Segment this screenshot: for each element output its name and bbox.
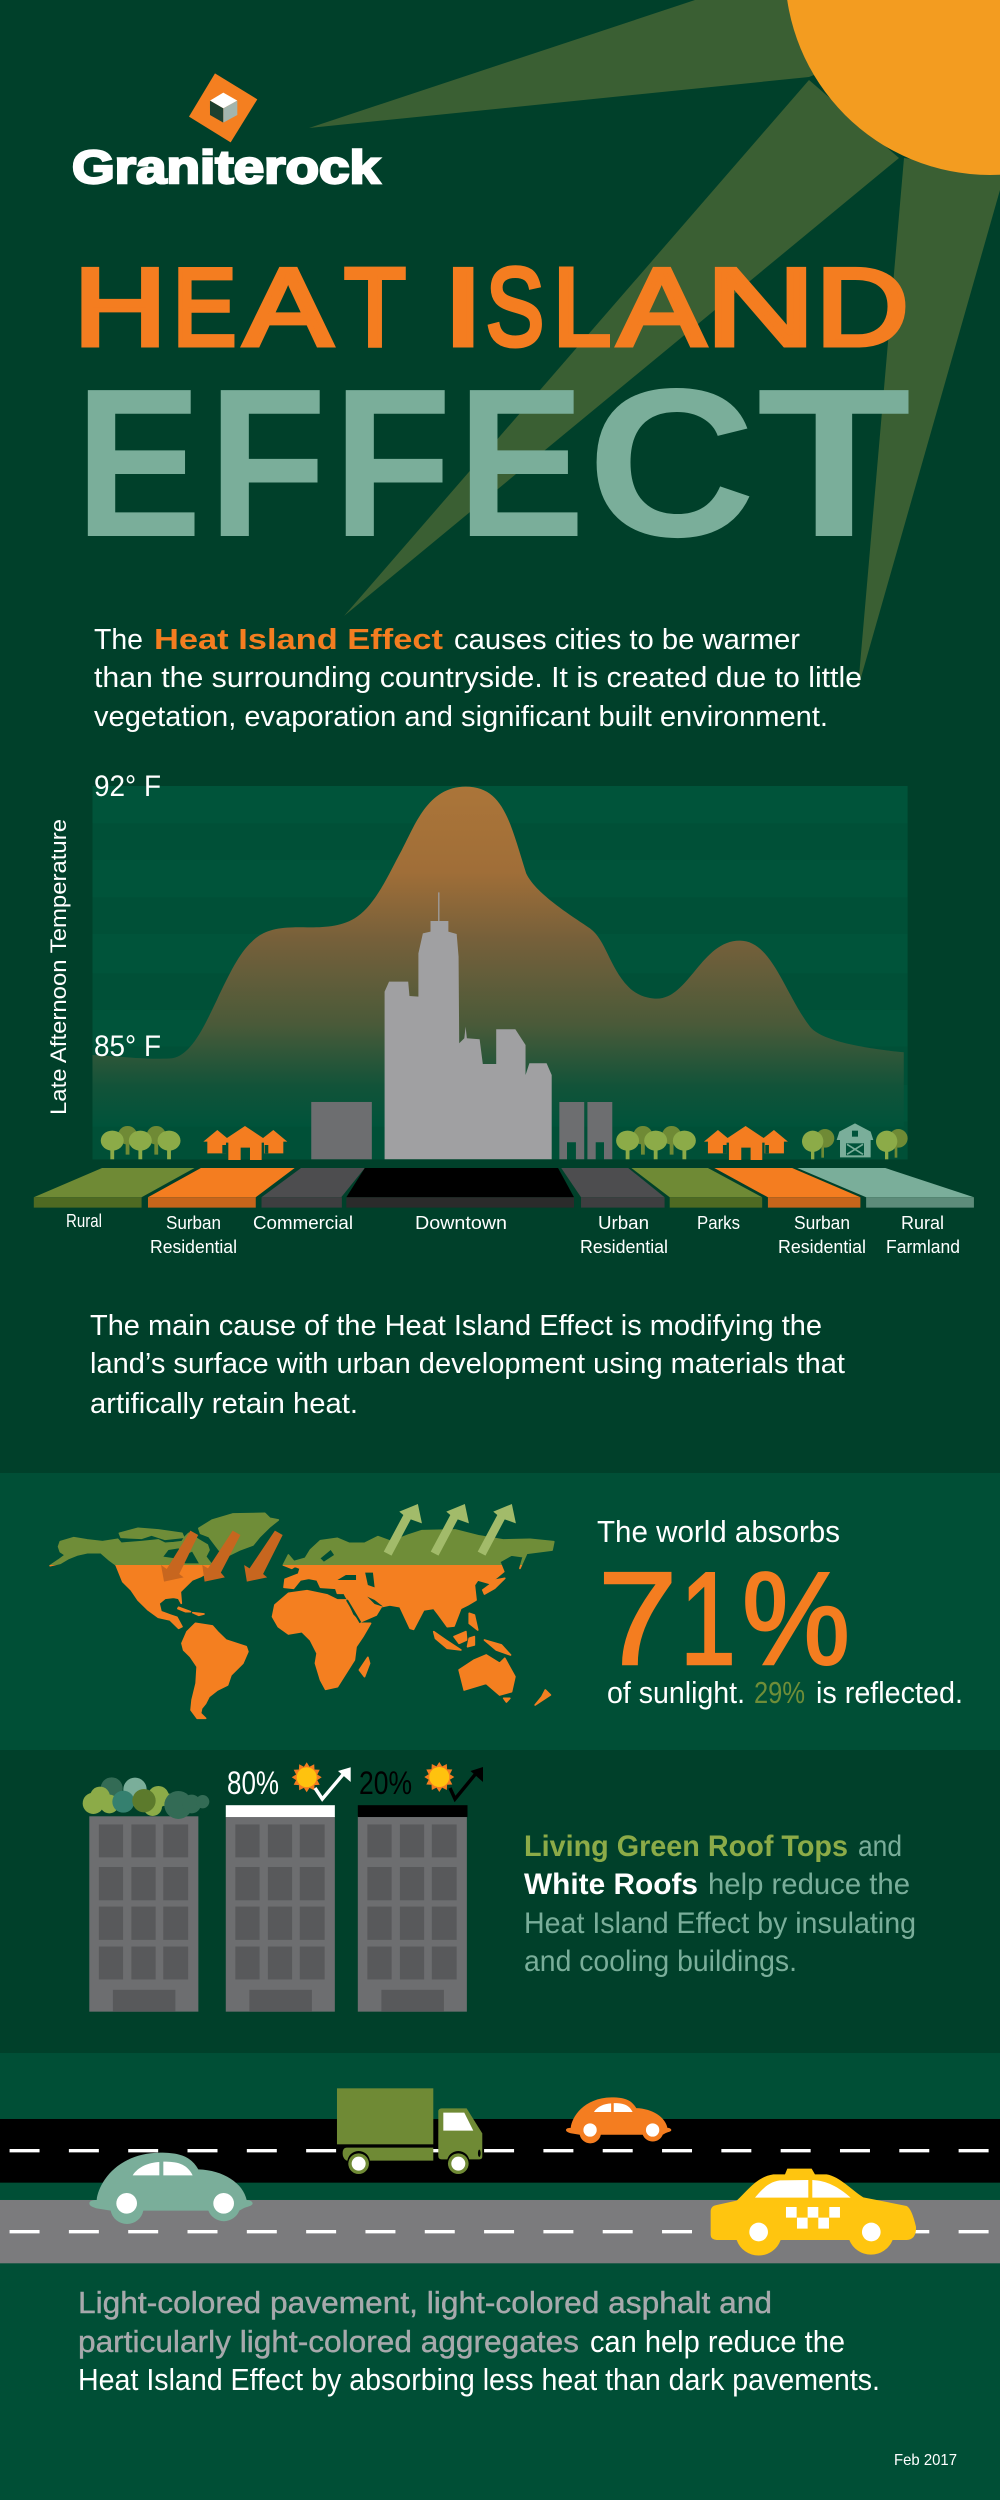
title: Effect: F: [208, 346, 327, 582]
grey road: [0, 2200, 1000, 2263]
title: Heat Island: A: [618, 245, 706, 369]
zone labels: Farmland: [886, 1237, 960, 1257]
suburban houses right: [704, 1126, 788, 1160]
taxi: [711, 2169, 916, 2256]
big number: %: [742, 1544, 850, 1692]
cause paragraph: artifically retain heat.: [90, 1388, 358, 1420]
roof text: help reduce the: [708, 1868, 910, 1901]
roads with vehicles: [0, 2088, 1000, 2263]
teal car: [89, 2153, 253, 2224]
title: Effect: F: [333, 346, 452, 582]
roof plants: [83, 1777, 209, 1819]
big number: 1: [680, 1545, 736, 1692]
building: black roof: [358, 1762, 483, 2012]
temperature curve: [92, 787, 904, 1127]
truck: [337, 2088, 482, 2174]
park trees: [616, 1126, 696, 1159]
zone labels: Residential: [778, 1237, 866, 1257]
title: Heat Island: E: [173, 246, 236, 368]
seas painted over land: [163, 1548, 383, 1623]
cause paragraph: [90, 1310, 845, 1420]
zone labels: Residential: [150, 1237, 237, 1257]
urban residential buildings: [559, 1102, 612, 1159]
logo: Graniterock: [72, 73, 380, 193]
roof text: White Roofs: [524, 1868, 698, 1901]
title: Heat Island: H: [74, 246, 166, 369]
date: Feb 2017: [894, 2452, 957, 2469]
title: Heat Island: D: [816, 247, 909, 369]
title: Effect: E: [457, 344, 585, 581]
zone labels: Rural: [901, 1213, 944, 1233]
title: Heat Island: I: [443, 245, 484, 369]
zone labels: Surban: [166, 1213, 221, 1233]
axis labels: [46, 770, 161, 1115]
zone labels: Residential: [580, 1237, 668, 1257]
downtown skyline: [385, 892, 552, 1159]
stat: world absorbs 71%: 29%: [754, 1675, 805, 1710]
title: Heat Island: N: [706, 246, 815, 369]
zone labels: Commercial: [253, 1213, 353, 1233]
zone labels: Urban: [598, 1213, 649, 1233]
map continents: [50, 1513, 554, 1718]
title: Heat Island: T: [344, 247, 406, 369]
intro text: [94, 624, 862, 733]
building: black roof: 20%: [359, 1765, 412, 1801]
title: Heat Island: L: [553, 246, 611, 369]
stat: world absorbs 71%: of sunlight.: [607, 1675, 745, 1710]
building: white roof: [226, 1762, 351, 2012]
icon: sun absorbed: [424, 1762, 483, 1799]
world map with sunlight arrows: [50, 1504, 554, 1718]
big number: 7: [598, 1546, 677, 1693]
roof text: [524, 1830, 916, 1978]
title: Effect: C: [587, 345, 756, 582]
arrows: absorbed sunlight: [161, 1531, 283, 1582]
arrows: reflected sunlight: [384, 1504, 516, 1556]
stat: world absorbs 71%: [597, 1514, 963, 1710]
zone labels: Rural: [66, 1211, 102, 1231]
chart: late afternoon temperature: [34, 770, 974, 1257]
roof text: Living Green Roof Tops: [524, 1830, 848, 1863]
building: white roof: 80%: [227, 1765, 279, 1801]
pavement text: Heat Island Effect by absorbing less heat than dark pavements.: [78, 2362, 880, 2397]
title: Heat Island: A: [244, 245, 332, 369]
axis labels: Late Afternoon Temperature: [46, 819, 71, 1115]
black road: [0, 2119, 1000, 2183]
intro text: The: [94, 624, 143, 656]
title: Effect: E: [75, 344, 202, 581]
zone labels: Surban: [794, 1213, 850, 1233]
chart background stripes: [92, 786, 908, 1159]
zone labels: Downtown: [415, 1213, 507, 1233]
pavement text: Light-colored pavement, light-colored asphalt and: [78, 2285, 772, 2320]
suburban houses: [203, 1126, 287, 1160]
roof text: Heat Island Effect by insulating: [524, 1907, 916, 1940]
cause paragraph: The main cause of the Heat Island Effect is modifying the: [90, 1310, 822, 1342]
pavement text: [78, 2285, 880, 2397]
roof text: and cooling buildings.: [524, 1945, 797, 1978]
icon: sun reflecting: [292, 1762, 351, 1799]
rural trees: [101, 1126, 180, 1159]
axis labels: 92° F: [94, 770, 161, 803]
intro text: than the surrounding countryside. It is created due to little: [94, 662, 862, 694]
intro text: vegetation, evaporation and significant built environment.: [94, 701, 828, 733]
orange car: [566, 2097, 671, 2143]
title: Heat Island: [74, 245, 909, 369]
title: Heat Island: S: [486, 246, 544, 369]
zone labels: Parks: [697, 1213, 740, 1233]
icon: orange diamond with cube: [189, 73, 257, 142]
pavement text: particularly light-colored aggregates: [78, 2324, 579, 2359]
title: Effect: T: [757, 345, 911, 581]
roof text: and: [858, 1830, 902, 1863]
logo: Graniterock: Graniterock: [72, 141, 380, 193]
icon: sun with rays: [309, 0, 1000, 688]
cause paragraph: land’s surface with urban development using materials that: [90, 1348, 845, 1380]
farm trees and barn: [802, 1123, 908, 1159]
building: living green roof: [83, 1777, 209, 2012]
land use strips: [34, 1168, 974, 1208]
axis labels: 85° F: [94, 1030, 161, 1063]
commercial building: [311, 1102, 372, 1159]
pavement text: can help reduce the: [590, 2324, 845, 2359]
band: pavement section: [0, 2053, 1000, 2500]
zone labels: [66, 1211, 960, 1257]
big number: [598, 1544, 850, 1693]
stat: world absorbs 71%: is reflected.: [816, 1675, 963, 1710]
band: world absorption section: [0, 1473, 1000, 1750]
stat: world absorbs 71%: The world absorbs: [597, 1514, 840, 1549]
intro text: Heat Island Effect: [154, 624, 443, 656]
title: Effect: [75, 344, 911, 582]
intro text: causes cities to be warmer: [454, 624, 800, 656]
